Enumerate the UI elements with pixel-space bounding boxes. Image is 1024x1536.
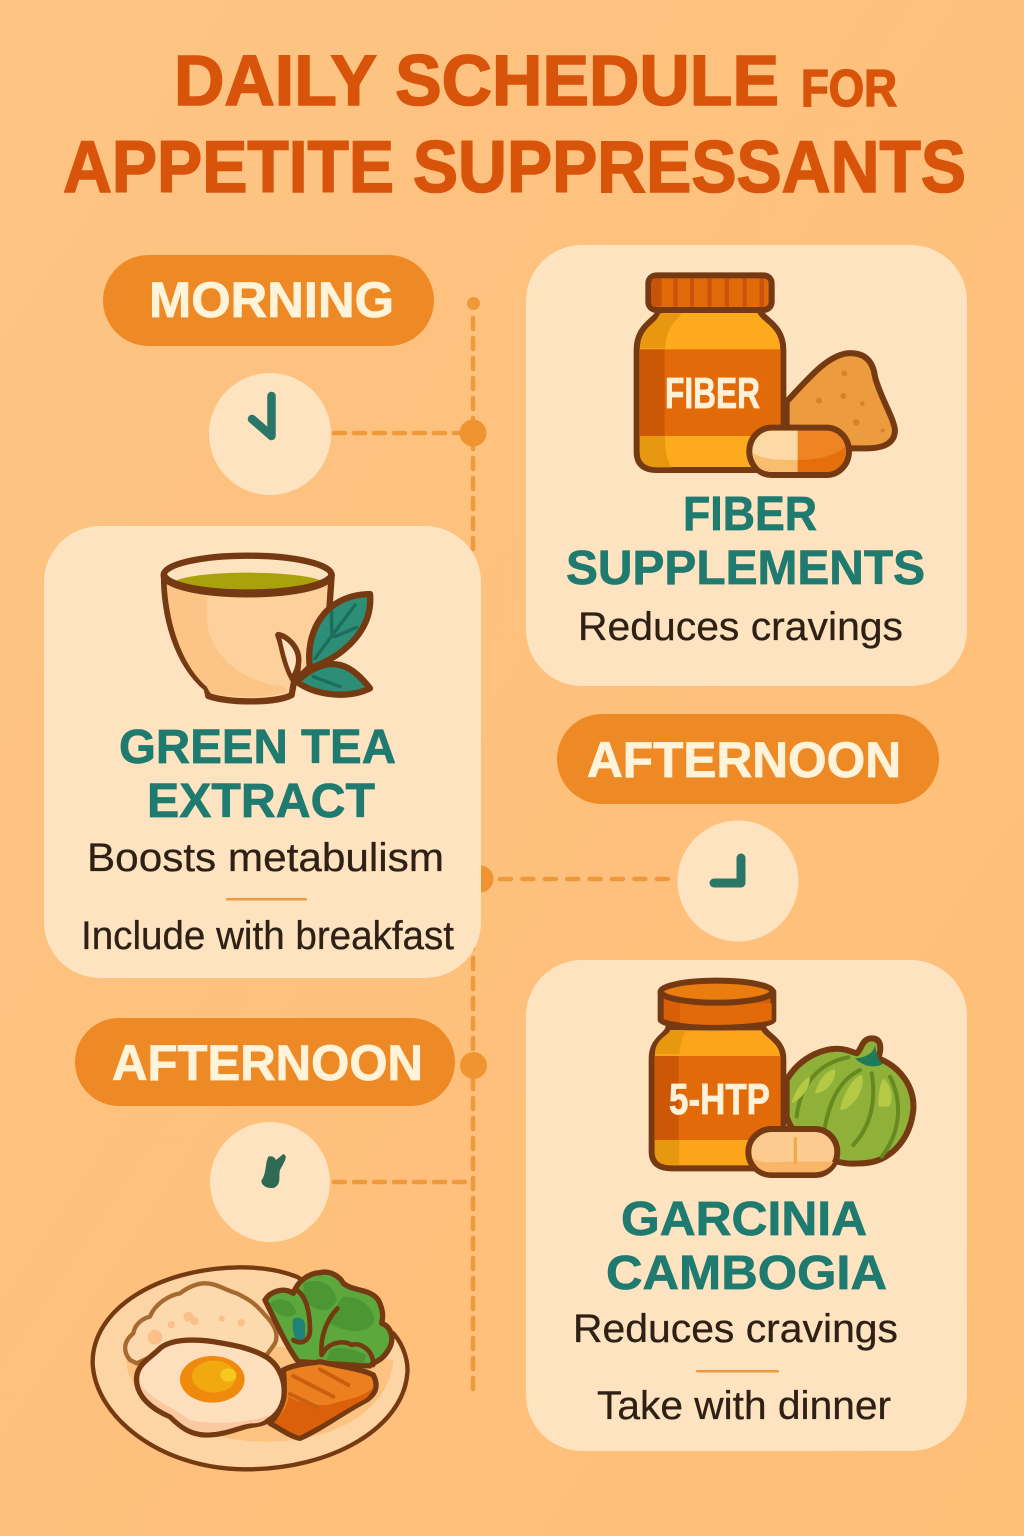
- heading: green tea extract: GREEN TEA: [119, 721, 396, 774]
- heading: garcinia cambogia: [606, 1193, 887, 1300]
- icon: 5-HTP bottle, pumpkin and tablet: [652, 981, 913, 1175]
- icon: fiber bottle, powder and capsule: [637, 275, 895, 475]
- afternoon pill right: [557, 714, 939, 804]
- heading: fiber supplements: FIBER: [683, 488, 817, 541]
- title: APPETITE SUPPRESSANTS: [63, 127, 966, 208]
- title: [63, 42, 966, 208]
- timing note: Take with dinner: [597, 1384, 891, 1428]
- icon: plate with rice, egg, broccoli and salmon: [93, 1267, 407, 1469]
- afternoon pill left: [75, 1018, 455, 1106]
- timing note: Include with breakfast: [81, 914, 454, 958]
- panel: fiber supplements: [526, 245, 967, 686]
- description: Reduces cravings: [578, 605, 903, 649]
- heading: green tea extract: [119, 721, 396, 828]
- label: FIBER: FIBER: [665, 369, 760, 418]
- heading: fiber supplements: [566, 488, 925, 595]
- morning pill: MORNING: [149, 272, 394, 328]
- afternoon clock left: [210, 1122, 330, 1242]
- heading: green tea extract: EXTRACT: [147, 775, 375, 828]
- panel: garcinia cambogia: [526, 960, 967, 1451]
- afternoon clock right: [678, 820, 798, 942]
- morning pill: [103, 255, 434, 346]
- icon: tea cup and leaves: [164, 556, 370, 701]
- heading: garcinia cambogia: CAMBOGIA: [606, 1247, 887, 1300]
- afternoon pill right: AFTERNOON: [587, 732, 901, 788]
- description: Boosts metabulism: [87, 836, 444, 880]
- heading: garcinia cambogia: GARCINIA: [621, 1193, 867, 1246]
- label: 5-HTP: 5-HTP: [669, 1075, 770, 1124]
- description: Reduces cravings: [573, 1307, 898, 1351]
- panel: green tea extract: [44, 526, 481, 978]
- afternoon pill left: AFTERNOON: [112, 1035, 423, 1091]
- timeline: [334, 297, 678, 1395]
- title: DAILY SCHEDULE: [174, 42, 779, 121]
- title: FOR: [801, 60, 897, 118]
- heading: fiber supplements: SUPPLEMENTS: [566, 542, 925, 595]
- morning clock: [209, 373, 331, 495]
